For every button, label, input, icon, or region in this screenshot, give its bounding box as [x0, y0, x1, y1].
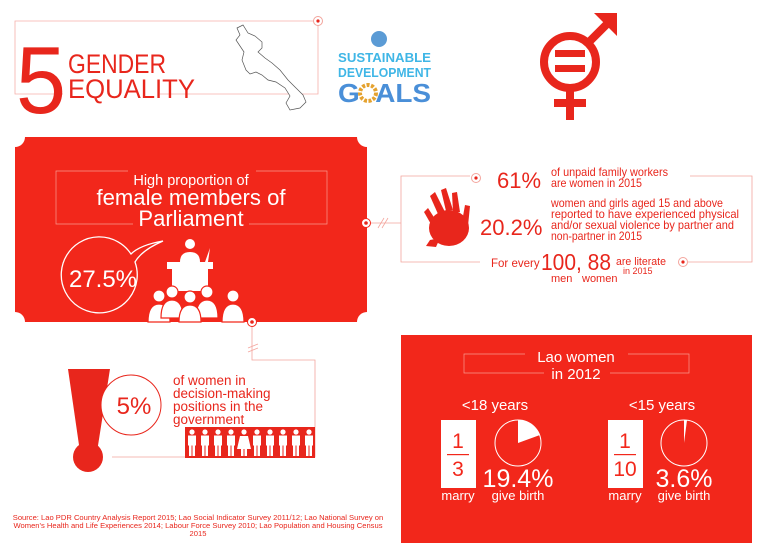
source text [13, 513, 383, 538]
group: under 15: <15 years [629, 397, 695, 414]
speech bubble 27.5% [61, 237, 163, 313]
stat: 20.2% [480, 196, 739, 243]
stat: literacy: For every [491, 258, 540, 270]
group: under 18: <18 years [462, 397, 528, 414]
group: under 15: 3.6% [656, 465, 712, 493]
stat: 61% [497, 165, 668, 193]
stat: 61%: of unpaid family workers [551, 165, 668, 179]
SDG logo: DEVELOPMENT [338, 65, 431, 80]
stat: 61%: are women in 2015 [551, 176, 642, 190]
group: under 15: give birth [658, 488, 710, 503]
group: under 18: 19.4% [483, 465, 553, 493]
stat: 5% decision-making: decision-making [173, 386, 271, 401]
stat: 20.2%: 20.2% [480, 215, 542, 240]
stat: 61%: 61% [497, 168, 541, 193]
SDG logo: SUSTAINABLE [338, 50, 431, 65]
SDG logo: G ALS [338, 78, 431, 108]
group: under 18: 3 [452, 458, 464, 481]
panel title: in 2012 [551, 366, 601, 383]
group: under 15 [608, 397, 712, 503]
stat: literacy: in 2015 [623, 266, 653, 276]
group: under 18: give birth [492, 488, 544, 503]
icon: exclamation [68, 369, 110, 472]
stat: 20.2%: non-partner in 2015 [551, 229, 642, 243]
connector dot markers [248, 174, 688, 326]
panel: Lao women 2012 [401, 335, 752, 543]
stat: 20.2%: and/or sexual violence by partner and [551, 218, 734, 232]
group: under 15: marry [608, 488, 642, 503]
panel: parliament [15, 137, 367, 322]
group: under 18: 1 [452, 430, 464, 453]
icon: red hand [424, 188, 470, 247]
group: under 18 [441, 397, 553, 503]
icon: people bar [185, 427, 315, 458]
stat: 5% decision-making: government [173, 412, 245, 427]
title box: female members of [96, 185, 286, 210]
panel title: Lao women [537, 349, 615, 366]
stat: 5% decision-making [101, 373, 271, 435]
stat: 20.2%: women and girls aged 15 and above [550, 196, 723, 210]
title: 5 gender equality: GENDER [68, 49, 166, 79]
source text: Women's Health and Life Experiences 2014; Labour Force Survey 2010; Lao Population and Housing Census [14, 521, 383, 530]
stat: 5% decision-making: of women in [173, 373, 246, 388]
title: 5 gender equality: EQUALITY [68, 74, 195, 104]
header dot [314, 16, 322, 26]
source text: 2015 [190, 529, 206, 538]
source text: Source: Lao PDR Country Analysis Report 2015; Lao Social Indicator Survey 2011/12; Lao National Survey on [13, 513, 383, 522]
group: under 15: 1 [619, 430, 631, 453]
stat: literacy: women [581, 273, 617, 285]
group: under 18: marry [441, 488, 475, 503]
panel title [464, 349, 689, 383]
stat: 5% decision-making: 5% [117, 393, 151, 420]
stat: 20.2%: reported to have experienced physical [551, 207, 739, 221]
title: 5 gender equality [16, 27, 195, 134]
header frame [15, 21, 318, 94]
SDG logo [338, 31, 431, 108]
stat: literacy [491, 249, 666, 285]
title box: Parliament [138, 206, 244, 231]
title box [56, 171, 327, 231]
icon: Laos map [236, 25, 306, 110]
connector dots and lines [112, 176, 752, 457]
speech bubble 27.5%: 27.5% [69, 266, 137, 293]
title box: High proportion of [133, 173, 250, 189]
stat: literacy: are literate [616, 256, 666, 268]
icon: podium and audience [148, 239, 244, 322]
stat: literacy: men [551, 273, 572, 285]
stat: literacy: 100, 88 [541, 249, 611, 275]
group: under 15: 10 [613, 458, 637, 481]
icon: gender equality symbol [544, 13, 617, 120]
stat: 5% decision-making: positions in the [173, 399, 263, 414]
title: 5 gender equality: 5 [16, 27, 66, 134]
